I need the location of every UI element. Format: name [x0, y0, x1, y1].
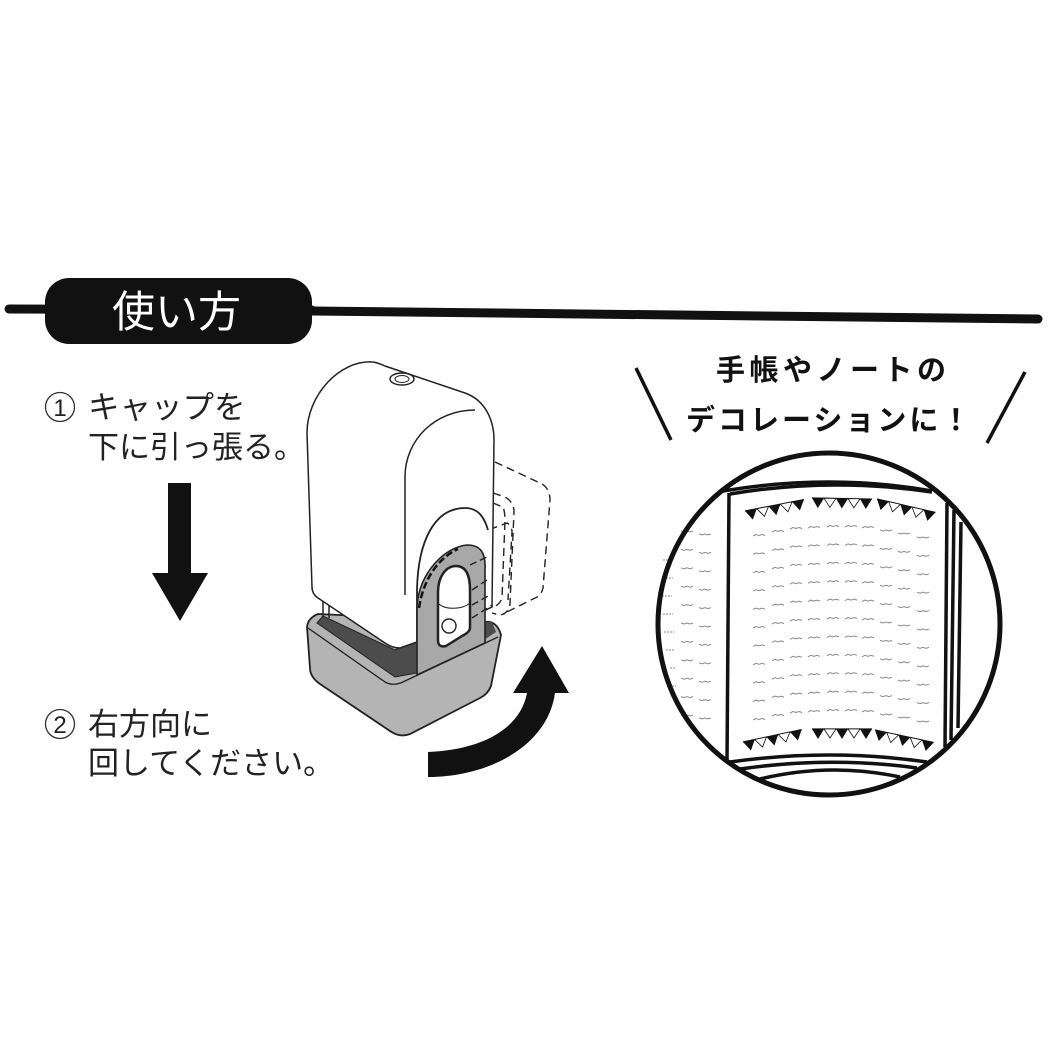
- heading: 使い方: [45, 278, 312, 344]
- step 1 text: キャップを: [88, 389, 246, 425]
- step 2 text: 2: [53, 712, 67, 739]
- page text rows: main page: [753, 526, 929, 722]
- cap inner arch: [405, 410, 475, 595]
- step 1 text: 下に引っ張る。: [88, 430, 305, 465]
- dashes over tag: [470, 557, 492, 618]
- tray inner right corner: [484, 622, 496, 640]
- page text rows: left page: [662, 531, 711, 719]
- arrow: down: [152, 483, 208, 621]
- callout: 手帳やノートのデコレーションに!: [686, 354, 973, 437]
- page edges: [723, 482, 961, 779]
- arrow: curved right: [428, 646, 569, 777]
- window arch: [417, 508, 488, 642]
- callout slash: left: [636, 368, 671, 440]
- tray rim: [308, 628, 498, 684]
- callout slash: right: [987, 372, 1025, 443]
- step 1 text: 1: [53, 395, 67, 422]
- tray inner: [317, 616, 417, 677]
- heading: 使い方: 使い方: [112, 289, 241, 337]
- illustration: stamp: [307, 362, 550, 735]
- cap hole: [390, 373, 414, 385]
- step 1 text: [46, 389, 305, 465]
- callout: 手帳やノートのデコレーションに!: 手帳やノートの: [716, 354, 951, 387]
- cap body: [307, 362, 494, 648]
- step 2 text: [46, 707, 334, 781]
- bunting: bottom: [743, 729, 934, 752]
- tag: [417, 545, 485, 675]
- bunting: top: [745, 498, 935, 522]
- step 2 text: 回してください。: [88, 746, 334, 781]
- illustration: open notebook in circle: [658, 453, 1000, 795]
- circle frame: [658, 453, 1000, 795]
- stem: [323, 600, 329, 618]
- callout: 手帳やノートのデコレーションに!: デコレーションに！: [686, 403, 973, 437]
- base tray: [307, 614, 501, 735]
- step 2 text: 右方向に: [88, 707, 212, 742]
- header line: [9, 309, 1038, 319]
- dashed rotation outlines: [453, 462, 550, 615]
